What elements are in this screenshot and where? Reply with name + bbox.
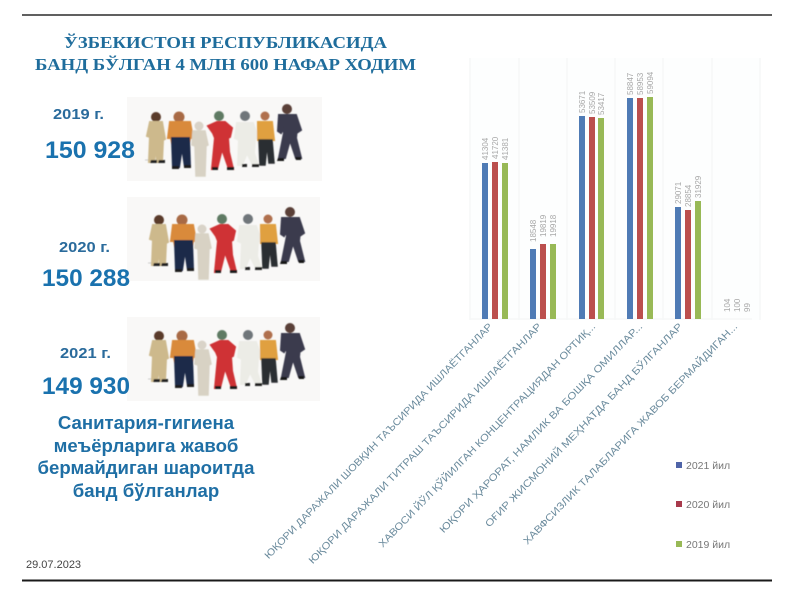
block: 2019 workers (45, 97, 322, 181)
2019 workers image (127, 97, 322, 181)
legend: 2020 йил (686, 499, 730, 511)
bars: temperature and humidity (626, 71, 655, 319)
category axis labels: ЮҚОРИ ДАРАЖАЛИ ТИТРАШ ТАЪСИРИДА ИШЛАЁТГАНЛАР (306, 320, 544, 566)
bars: air pollutants: 53671 (578, 90, 587, 113)
2019 value: 150 928 (45, 137, 135, 164)
bars: high vibration: 18548 (529, 219, 538, 242)
bars: heavy physical labour (674, 175, 703, 319)
title: ЎЗБЕКИСТОН РЕСПУБЛИКАСИДА (64, 33, 388, 52)
title: БАНД БЎЛГАН 4 МЛН 600 НАФАР ХОДИМ (35, 55, 416, 74)
bars: safety requirements (723, 298, 752, 312)
bars: high vibration: 19819 (539, 214, 548, 237)
top rule (22, 14, 772, 16)
category axis labels: ХАВФСИЗЛИК ТАЛАБЛАРИГА ЖАВОБ БЕРМАЙДИГАН... (520, 320, 740, 547)
bars: air pollutants: 53417 (597, 92, 606, 115)
2021 value: 149 930 (42, 373, 130, 400)
bars: heavy physical labour: 28854 (684, 184, 693, 207)
2020 year label: 2020 г. (59, 239, 110, 256)
2019 year label: 2019 г. (53, 106, 104, 123)
bars: high noise: 41304 (481, 137, 490, 160)
bars: high noise (481, 136, 510, 319)
category axis labels: ХАВОСИ ЙЎЛ ҚЎЙИЛГАН КОНЦЕНТРАЦИЯДАН ОРТИҚ... (376, 320, 598, 550)
bottom rule (22, 580, 772, 582)
date: 29.07.2023 (26, 559, 81, 571)
2021 year label: 2021 г. (60, 345, 111, 362)
caption: Санитария-гигиена (58, 412, 235, 433)
bars: safety requirements: 99 (743, 303, 752, 312)
bar chart (470, 58, 760, 320)
bars: high noise: 41720 (491, 136, 500, 159)
2020 workers image (127, 197, 320, 281)
bars: high vibration (529, 214, 558, 319)
bars: heavy physical labour: 31929 (694, 175, 703, 198)
legend (676, 460, 730, 551)
bars: safety requirements: 100 (733, 298, 742, 312)
title (35, 33, 416, 74)
bars: high noise: 41381 (501, 137, 510, 160)
caption (38, 412, 255, 501)
category axis labels (262, 320, 740, 566)
bars: air pollutants (578, 90, 606, 319)
legend: 2019 йил (686, 539, 730, 551)
block: 2021 workers (42, 317, 320, 401)
2020 value: 150 288 (42, 265, 130, 292)
bars: temperature and humidity: 59094 (646, 71, 655, 94)
2021 workers image (127, 317, 320, 401)
bars: temperature and humidity: 58847 (626, 72, 635, 95)
bars: air pollutants: 53509 (588, 91, 597, 114)
category axis labels: ЮҚОРИ ДАРАЖАЛИ ШОВҚИН ТАЪСИРИДА ИШЛАЁТГАНЛАР (262, 320, 495, 561)
caption: меъёрларига жавоб (54, 435, 238, 456)
caption: бермайдиган шароитда (38, 457, 255, 478)
caption: банд бўлганлар (73, 480, 219, 501)
bars: temperature and humidity: 58953 (636, 72, 645, 95)
category axis labels: ОҒИР ЖИСМОНИЙ МЕҲНАТДА БАНД БЎЛГАНЛАР (482, 320, 685, 530)
bars: heavy physical labour: 29071 (674, 181, 683, 204)
bars: high vibration: 19918 (549, 214, 558, 237)
bars: safety requirements: 104 (723, 298, 732, 312)
block: 2020 workers (42, 197, 320, 292)
category axis labels: ЮҚОРИ ҲАРОРАТ, НАМЛИК ВА БОШҚА ОМИЛЛАР... (438, 321, 645, 536)
legend: 2021 йил (686, 460, 730, 472)
